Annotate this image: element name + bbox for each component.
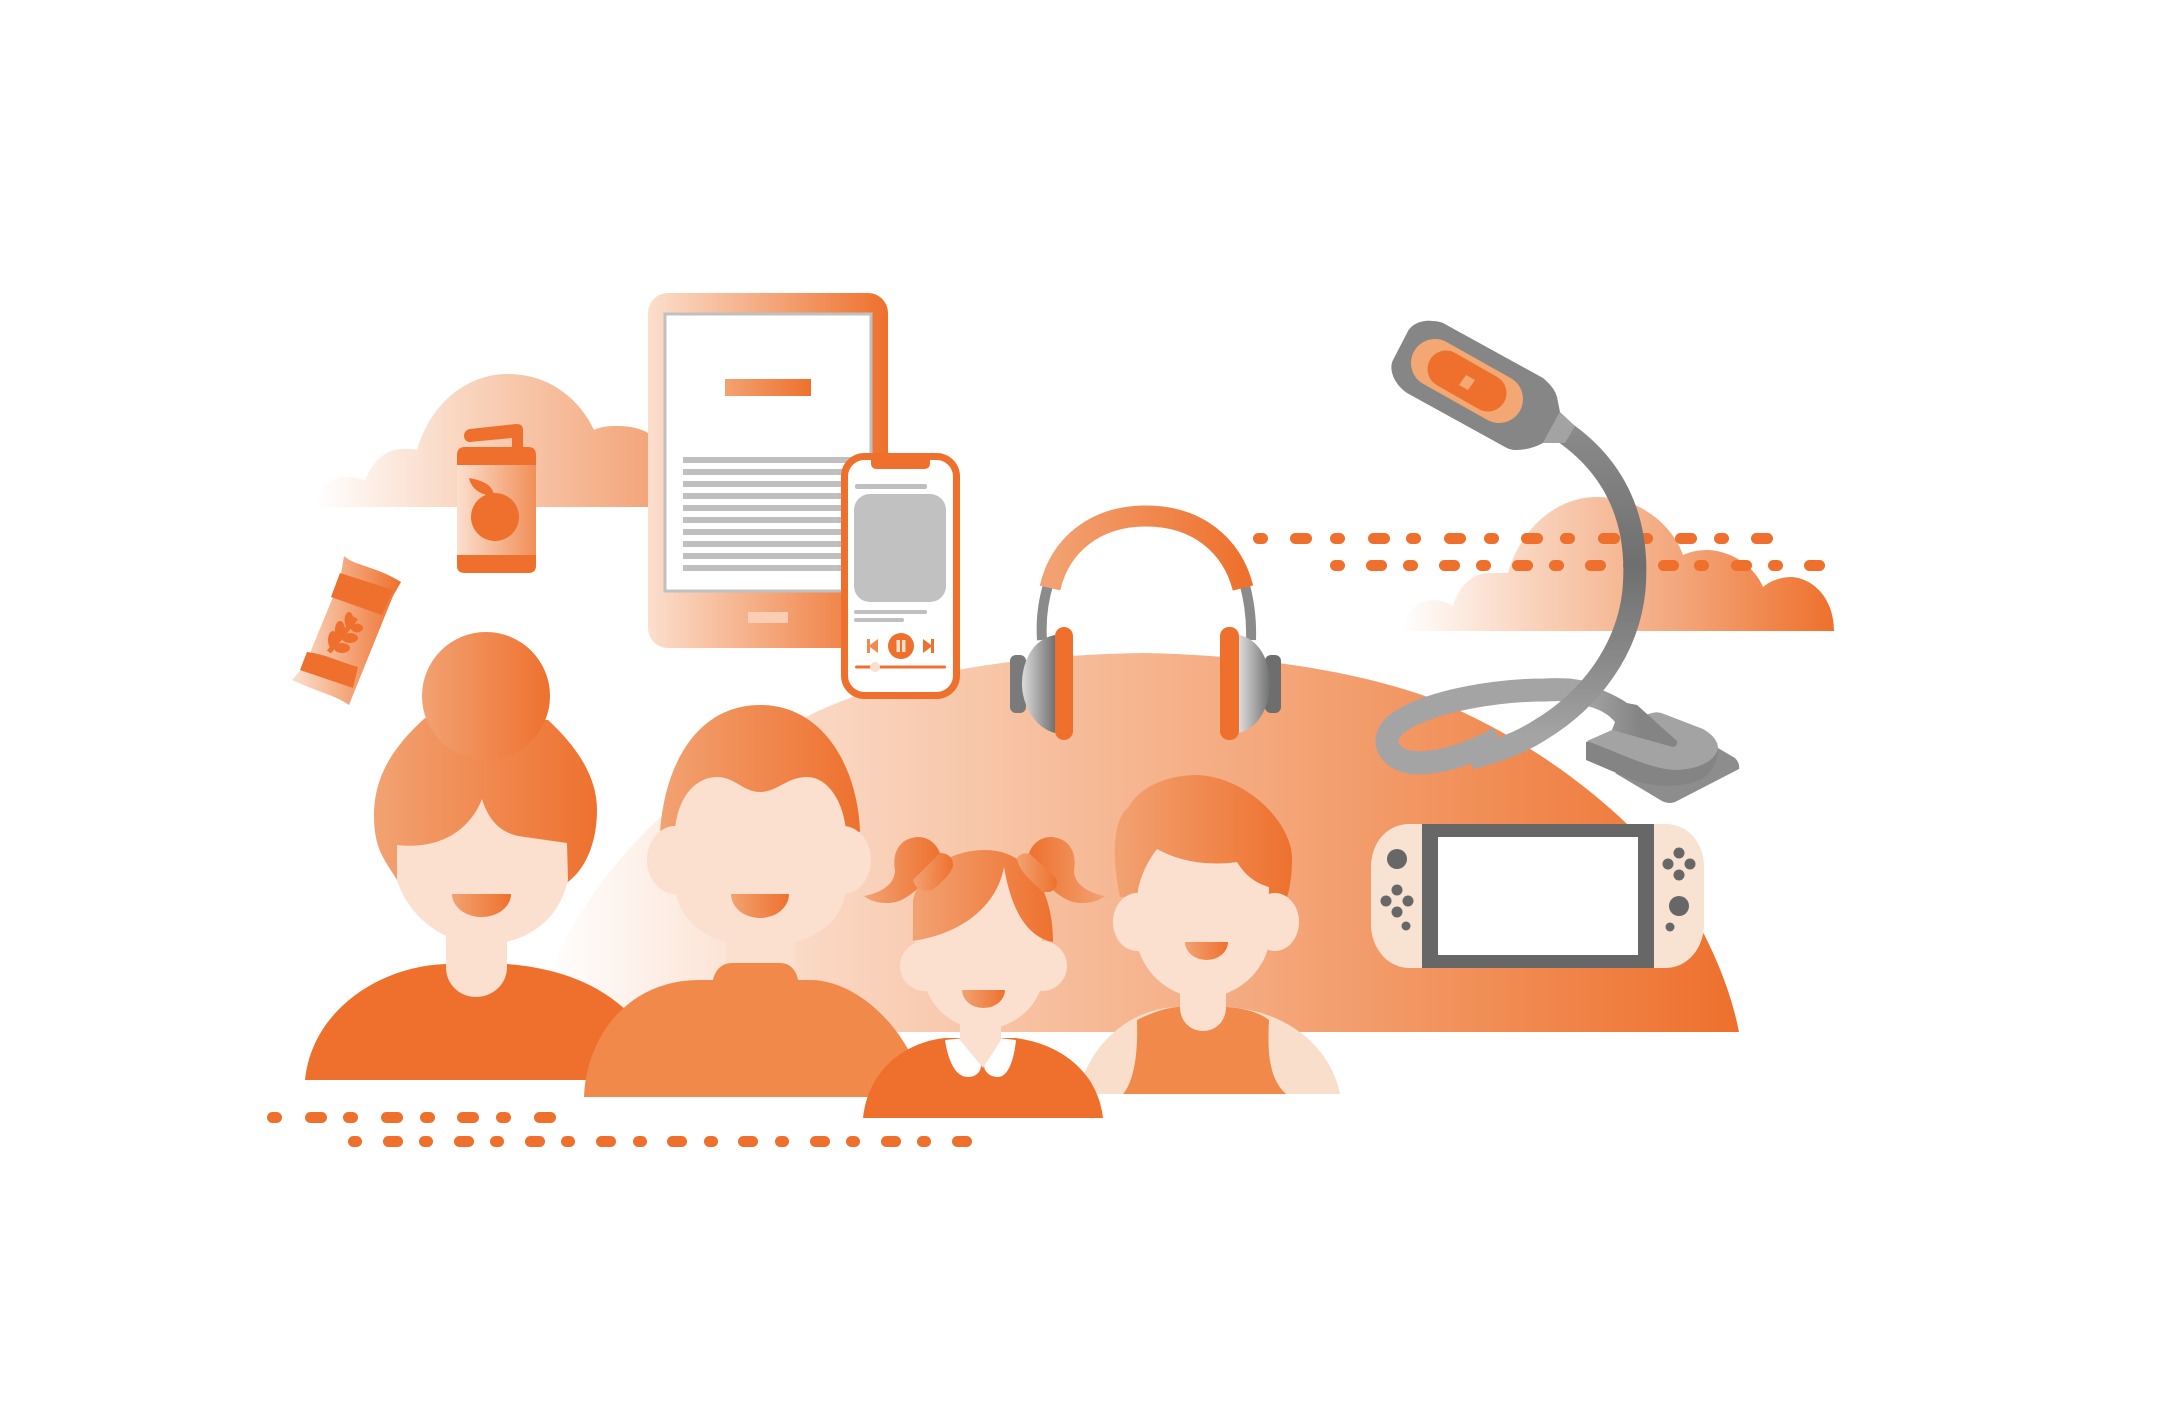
body: [584, 980, 925, 1097]
hair bun: [422, 632, 550, 760]
neck: [1180, 960, 1226, 1031]
leaf: [328, 612, 363, 653]
left buttons: [1380, 849, 1414, 930]
character: mother: [305, 632, 660, 1080]
icon: smartphone music player: [844, 456, 956, 696]
body: [305, 964, 660, 1080]
neck: [726, 920, 795, 970]
dashed line: lower 2: [348, 1136, 972, 1147]
face: [675, 777, 846, 947]
mouth: [1185, 942, 1228, 960]
cloud: left: [315, 374, 648, 507]
right hair tie: [1017, 853, 1057, 892]
track lines: [854, 610, 927, 614]
body: [863, 1038, 1103, 1118]
neck: [960, 1020, 1001, 1068]
icon: snack bar: [292, 556, 401, 705]
hair: [1115, 775, 1292, 897]
base plate: [1615, 748, 1739, 803]
fruit leaf: [469, 478, 494, 497]
progress slider: [855, 666, 946, 668]
icon: tablet e-reader: [648, 293, 888, 648]
bottle label: [457, 460, 536, 560]
face: [913, 860, 1045, 1030]
mouth: [731, 894, 789, 918]
fruit: [471, 493, 519, 541]
bottle base: [457, 555, 536, 573]
dashed line: lower 1: [267, 1112, 556, 1123]
lamp head: [1391, 321, 1560, 450]
right buttons: [1662, 848, 1696, 932]
bottle cap: [457, 447, 536, 465]
title bar: [725, 379, 811, 396]
outer cap left: [1010, 655, 1026, 713]
thin band right: [1244, 582, 1251, 640]
outer cap right: [1265, 655, 1281, 713]
phone body: [844, 456, 956, 696]
screen: [1438, 837, 1638, 955]
next button: [923, 639, 934, 653]
collar: [713, 963, 798, 980]
character: father: [584, 705, 925, 1097]
dashed line: upper right 2: [1330, 560, 1825, 571]
hair front: [913, 850, 1053, 942]
left ear: [900, 941, 950, 991]
icon: handheld game console: [1371, 824, 1704, 968]
right ear: [1251, 893, 1299, 951]
tablet screen: [665, 314, 871, 591]
dashed line: upper right 1: [1253, 533, 1773, 544]
tablet body: [648, 293, 888, 648]
background hill: [545, 653, 1739, 1032]
left controller: [1371, 824, 1422, 968]
ear cup right: [1239, 635, 1270, 733]
icon: clip-on book light: [1387, 321, 1739, 803]
pause button: [888, 633, 914, 659]
clip wedge and tail: [1580, 687, 1677, 747]
ear cup left: [1022, 635, 1055, 733]
hair: [660, 705, 860, 832]
icon: juice bottle: [457, 424, 536, 573]
ear pad left: [1055, 627, 1073, 740]
icon: headphones: [1010, 516, 1281, 740]
clip side: [1586, 730, 1718, 786]
light inner: [1446, 369, 1488, 393]
neck joint: [1543, 412, 1575, 443]
coil: [1387, 690, 1595, 763]
character: boy: [1078, 775, 1340, 1094]
wrapper: [292, 556, 401, 705]
text lines: [683, 457, 853, 571]
straw: [464, 424, 523, 447]
top line: [855, 484, 927, 489]
light outer: [1435, 363, 1499, 399]
neck: [446, 930, 507, 997]
screen frame: [1422, 824, 1654, 968]
left ear: [1113, 893, 1161, 951]
head band: [1050, 516, 1243, 588]
face: [1137, 849, 1269, 998]
arms: [1078, 1007, 1340, 1094]
album cover: [854, 494, 946, 602]
previous button: [867, 639, 878, 653]
cloud: right: [1402, 497, 1834, 631]
notch: [871, 458, 930, 469]
lower band: [300, 652, 358, 688]
face: [397, 799, 568, 946]
home button: [748, 612, 788, 623]
right pigtail: [1029, 837, 1105, 903]
upper band: [331, 573, 393, 615]
right ear: [1017, 941, 1067, 991]
left pigtail: [864, 837, 940, 903]
vest: [1123, 1007, 1286, 1094]
light center: [1459, 375, 1475, 390]
ear pad right: [1220, 627, 1239, 740]
gooseneck: [1470, 428, 1635, 758]
clip top: [1587, 712, 1718, 770]
thin band left: [1042, 582, 1049, 640]
mouth: [452, 894, 511, 917]
right controller: [1654, 824, 1704, 968]
right ear: [815, 826, 871, 894]
hair back: [374, 718, 597, 882]
mouth: [962, 990, 1005, 1008]
left ear: [647, 826, 703, 894]
collar: [945, 1037, 1016, 1077]
left hair tie: [913, 853, 953, 891]
character: girl: [863, 837, 1105, 1118]
